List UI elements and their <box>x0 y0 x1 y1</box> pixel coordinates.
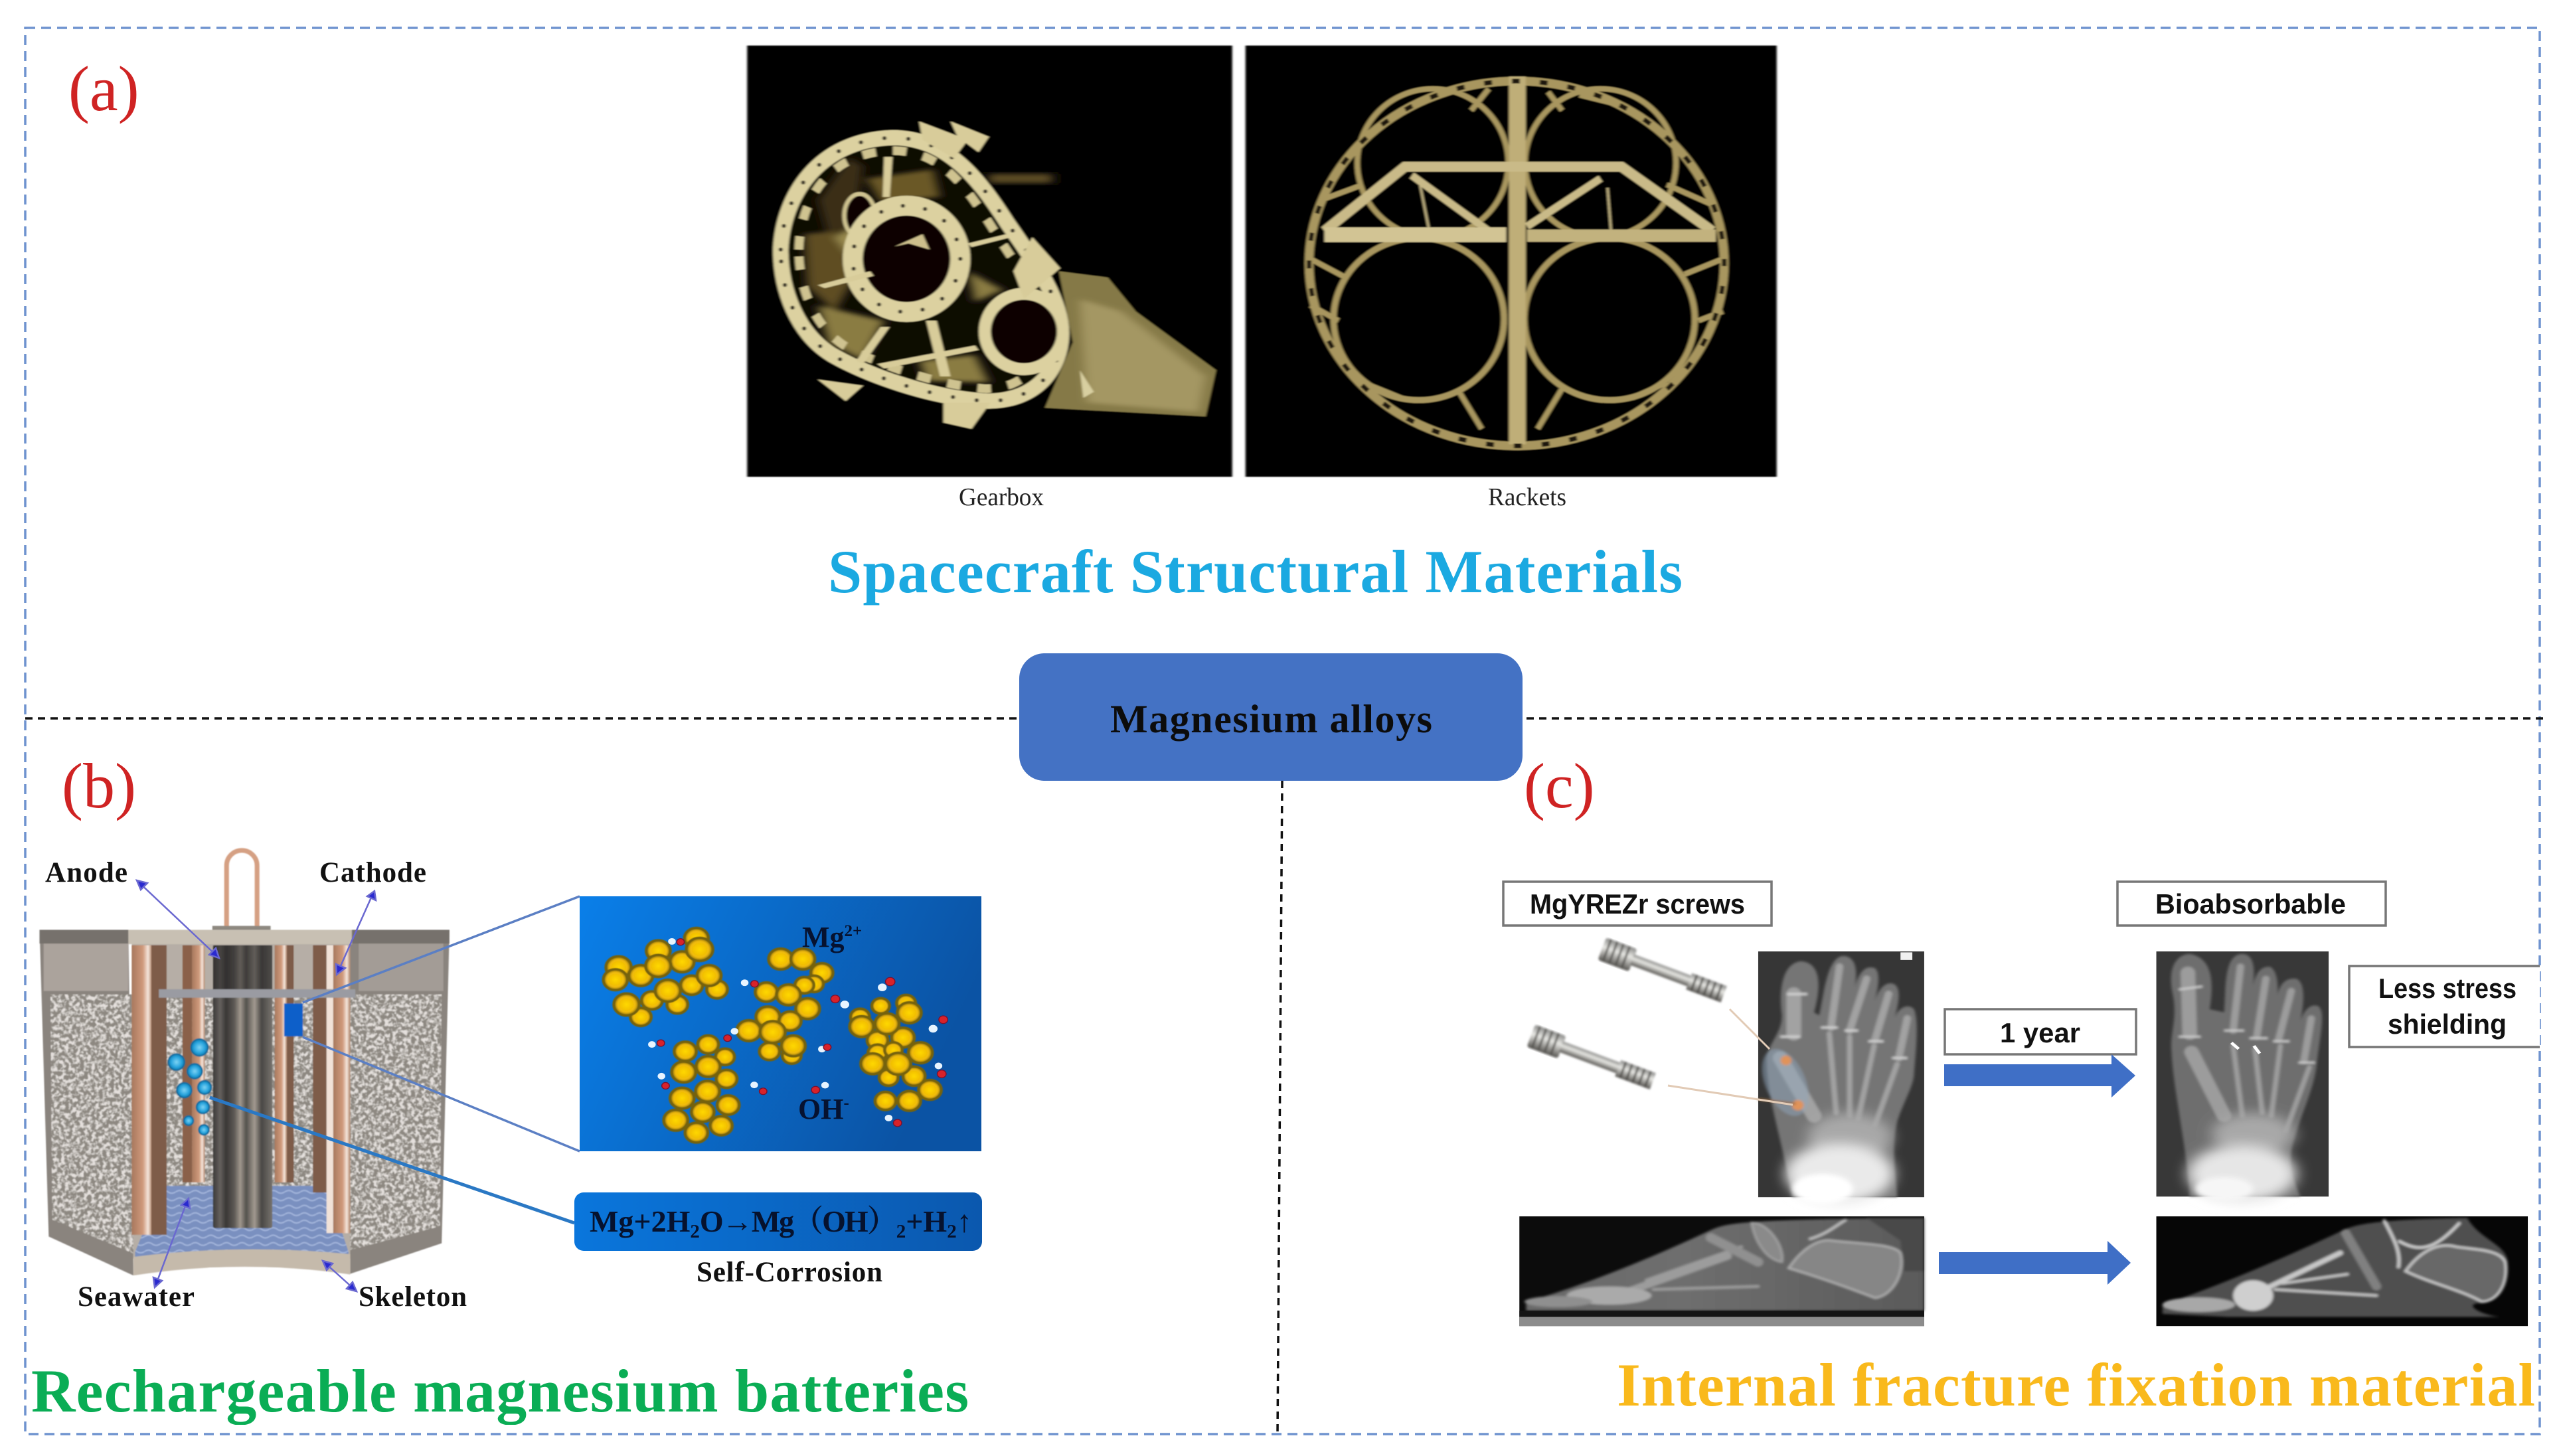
reaction formula: +H <box>906 1204 947 1238</box>
heading: Internal fracture fixation material: Internal fracture fixation material <box>1617 1351 2535 1419</box>
label box: 1 year <box>1945 1009 2136 1054</box>
panel: internal fracture fixation material <box>1503 750 2540 1419</box>
photo: rackets <box>1246 46 1777 477</box>
ion label: OH-: - <box>843 1094 849 1112</box>
label box: MgYREZr screws: MgYREZr screws <box>1530 888 1745 920</box>
panel label (a): (a) <box>68 53 139 124</box>
bottom skeleton plate <box>133 1250 350 1275</box>
reaction formula: O→Mg（OH） <box>700 1204 896 1238</box>
photo: gearbox <box>747 46 1232 477</box>
caption: Rackets: Rackets <box>1488 483 1566 511</box>
anode column <box>213 945 272 1228</box>
arrow: lateral progression <box>1939 1241 2131 1285</box>
label box: MgYREZr screws <box>1503 882 1772 926</box>
magnesium atom clusters <box>604 928 942 1143</box>
center node: Magnesium alloys <box>1019 653 1523 781</box>
panel label (c): (c) <box>1524 750 1595 821</box>
heading: Rechargeable magnesium batteries: Rechargeable magnesium batteries <box>31 1357 969 1425</box>
ion label: Mg2+: 2+ <box>845 922 862 940</box>
reaction formula: 2 <box>690 1221 700 1242</box>
battery cutaway illustration <box>40 850 450 1275</box>
seawater bubbles <box>168 1039 211 1135</box>
left wall <box>40 930 133 1275</box>
x-ray: foot lateral view before <box>1519 1216 1924 1326</box>
panel: spacecraft structural materials <box>68 46 1777 606</box>
hydroxide ions <box>648 938 948 1127</box>
label: Cathode: Cathode <box>319 857 426 888</box>
label: Anode: Anode <box>45 857 127 888</box>
inset: Mg clusters in seawater <box>580 896 981 1151</box>
arrow: cathode pointer <box>336 891 376 975</box>
label box: Less stress shielding: Less stress <box>2378 973 2517 1004</box>
small blue zoom marker <box>284 1003 303 1036</box>
reaction formula: Mg+2H <box>590 1204 690 1238</box>
label box: Less stress shielding: shielding <box>2388 1009 2507 1040</box>
caption: Gearbox: Gearbox <box>959 483 1044 511</box>
label: Skeleton: Skeleton <box>359 1281 467 1313</box>
panel: rechargeable magnesium batteries <box>31 750 982 1425</box>
reaction formula: 2 <box>947 1221 957 1242</box>
caption: Self-Corrosion: Self-Corrosion <box>697 1257 882 1288</box>
icon: screw upper <box>1598 937 1728 1005</box>
zoom connector lines <box>210 896 580 1223</box>
arrow: anode pointer <box>137 880 219 958</box>
label: Seawater: Seawater <box>78 1281 195 1313</box>
label box: 1 year: 1 year <box>2000 1017 2080 1048</box>
label box: Less stress shielding <box>2349 966 2540 1047</box>
reaction formula: ↑ <box>957 1204 972 1238</box>
support band <box>159 989 355 998</box>
heading: Spacecraft Structural Materials: Spacecraft Structural Materials <box>828 538 1683 606</box>
floor seawater <box>135 1186 349 1260</box>
label box: Bioabsorbable <box>2117 882 2386 926</box>
icon: screw lower <box>1527 1024 1657 1092</box>
reaction formula box <box>574 1192 982 1251</box>
x-ray: foot front view after one year <box>2157 951 2329 1202</box>
center node: Magnesium alloys: Magnesium alloys <box>1110 697 1432 741</box>
label box: Bioabsorbable: Bioabsorbable <box>2155 888 2346 920</box>
copper cathodes <box>131 945 350 1235</box>
top plate <box>128 930 352 944</box>
x-ray: foot front view before <box>1753 951 1924 1204</box>
x-ray: foot lateral view after one year <box>2157 1216 2528 1326</box>
ion label: OH-: OH <box>798 1093 843 1125</box>
arrow: seawater pointer <box>153 1198 190 1287</box>
arrow: skeleton pointer <box>323 1261 357 1291</box>
arrow: 1 year progression <box>1944 1054 2135 1097</box>
right wall <box>350 930 450 1274</box>
reaction formula: 2 <box>896 1221 906 1242</box>
screw callout lines <box>1668 1009 1793 1105</box>
panel label (b): (b) <box>62 750 136 821</box>
icon: battery handle <box>226 850 257 927</box>
ion label: Mg2+: Mg <box>802 921 845 953</box>
